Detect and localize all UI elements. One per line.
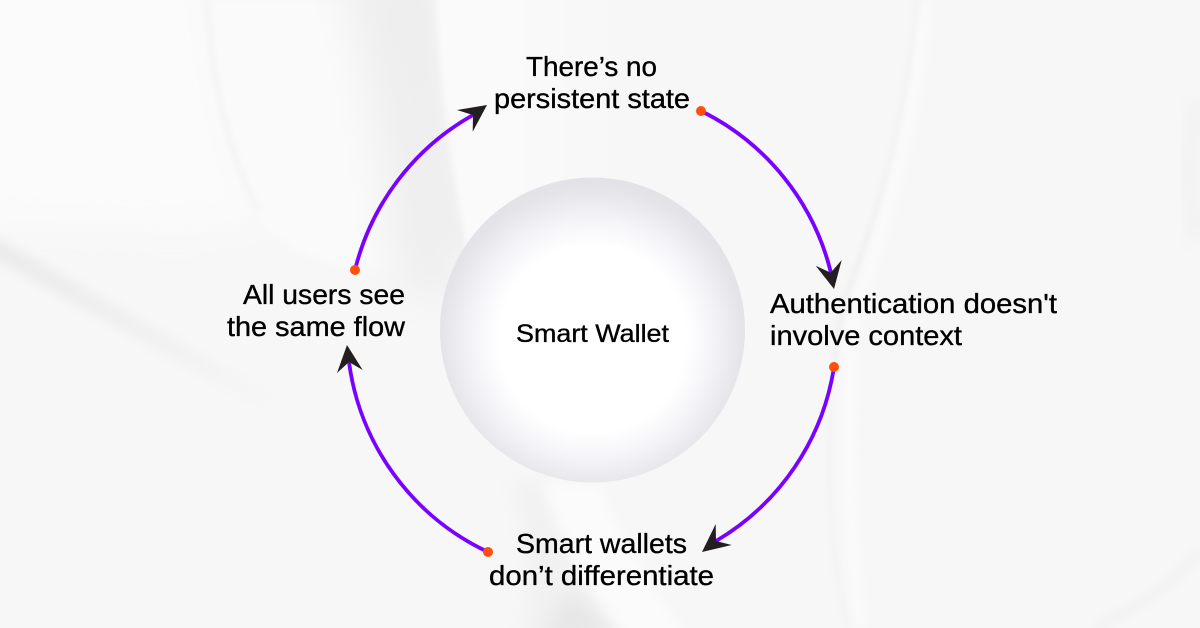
- label: There's no persistent state: There’s no: [526, 51, 657, 82]
- label: All users see the same flow: [227, 279, 405, 342]
- background: silky folds: [0, 0, 608, 628]
- label: Authentication doesn't involve context: [770, 288, 1057, 351]
- arrow: all users to persistent state: [350, 105, 487, 275]
- label: There's no persistent state: [494, 51, 690, 114]
- label: There's no persistent state: persistent state: [494, 83, 690, 114]
- sphere label: Smart Wallet: [516, 320, 669, 348]
- label: Authentication doesn't involve context: Authentication doesn't: [770, 288, 1057, 319]
- arrow: smart wallets to all users: [337, 345, 493, 557]
- label: Authentication doesn't involve context: involve context: [770, 320, 962, 351]
- label: Smart wallets don't differentiate: don’t differentiate: [489, 560, 714, 591]
- label: Smart wallets don't differentiate: Smart wallets: [516, 528, 687, 559]
- label: All users see the same flow: All users see: [243, 279, 405, 310]
- arrow: persistent state to authentication: [696, 106, 842, 289]
- label: Smart wallets don't differentiate: [489, 528, 714, 591]
- arrow: authentication to smart wallets: [702, 362, 839, 552]
- label: All users see the same flow: the same flow: [227, 311, 405, 342]
- central sphere: Smart Wallet: [440, 178, 745, 482]
